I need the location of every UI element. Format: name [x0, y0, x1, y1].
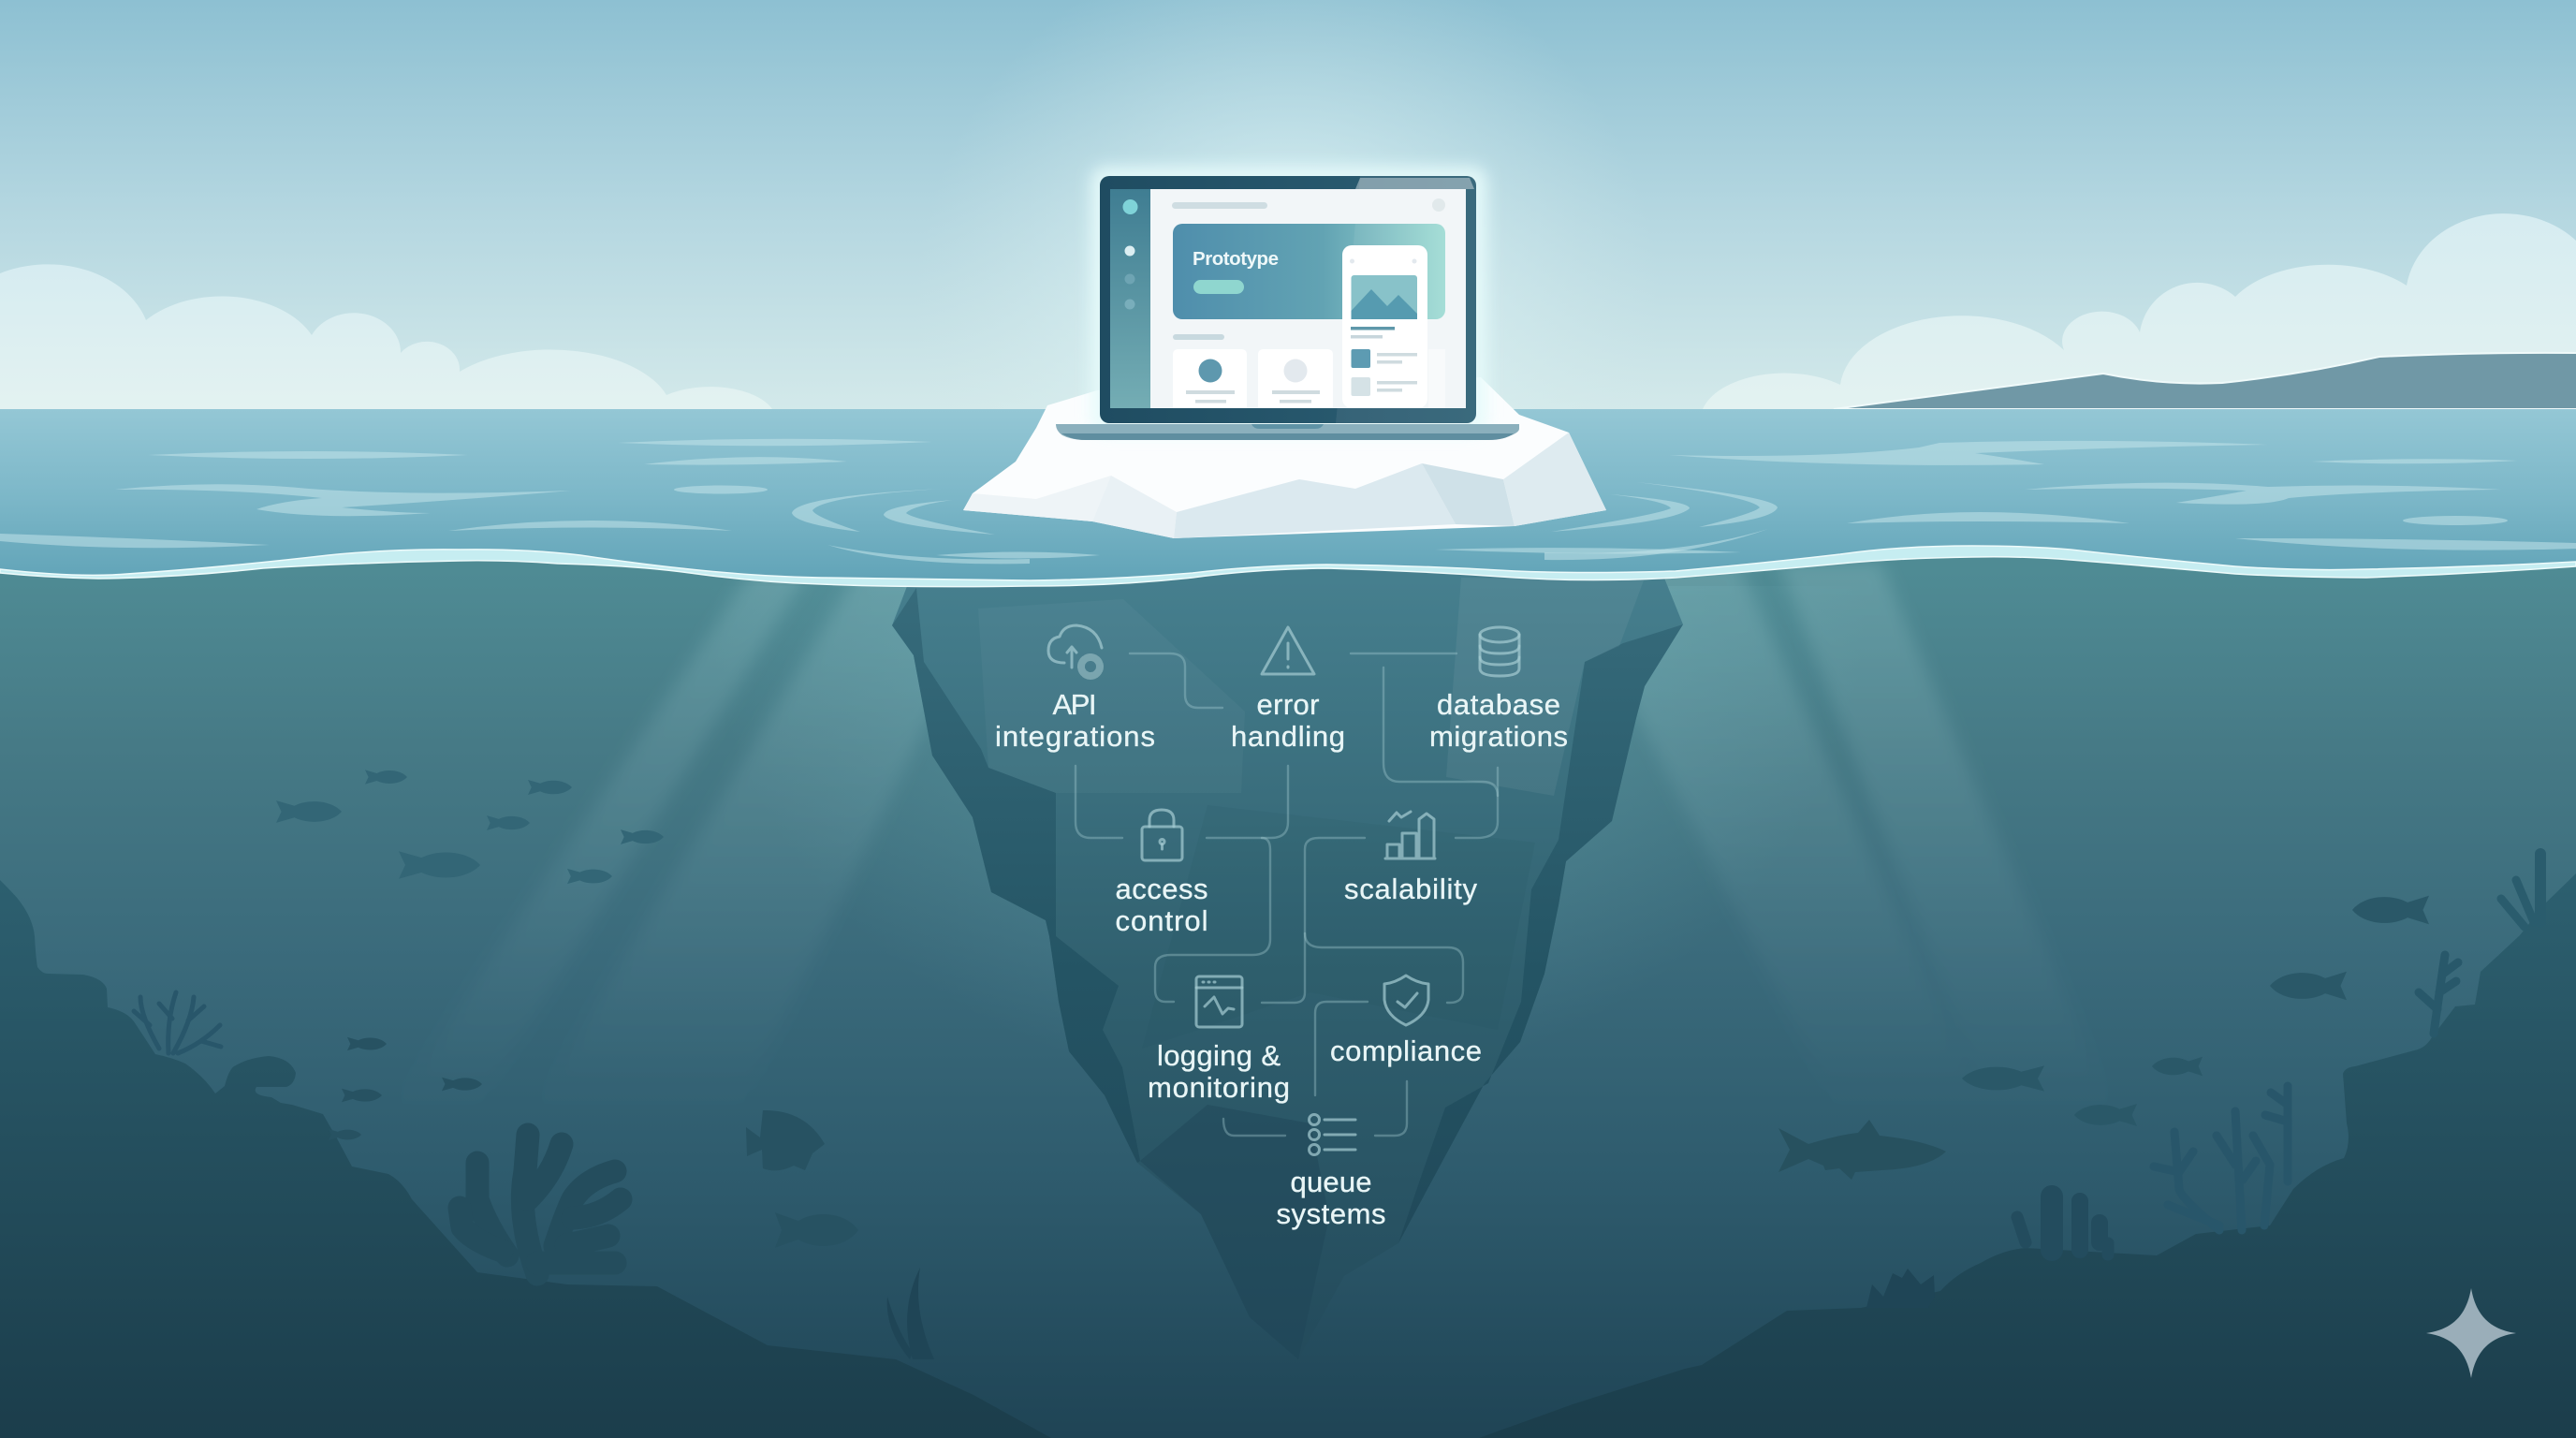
angelfish: [746, 1110, 825, 1170]
laptop: [1056, 167, 1519, 440]
berg body: [892, 569, 1683, 1187]
right seabed and coral: [1479, 854, 2576, 1438]
tube sponge: [2017, 1196, 2108, 1255]
upper fish: [276, 770, 664, 884]
item: API integrations: [995, 625, 1155, 753]
icon: padlock: [1142, 810, 1182, 860]
right light facet: [1446, 578, 1644, 796]
seaweed: [887, 1268, 934, 1359]
label: error handling: handling: [1231, 720, 1345, 753]
laptop base: [1056, 424, 1519, 440]
ice facet front right: [1422, 463, 1515, 526]
right terrain: [1479, 873, 2576, 1438]
clouds right: [1703, 213, 2576, 409]
phone mockup: [1342, 245, 1427, 408]
right dark facet: [1398, 624, 1683, 1243]
ice facet front left: [1092, 476, 1177, 538]
school of fish left: [276, 770, 858, 1248]
label: database migrations: database: [1437, 688, 1560, 721]
label: logging & monitoring: logging &: [1157, 1039, 1281, 1072]
connector lines: [1076, 653, 1498, 1136]
left terrain: [0, 880, 1051, 1438]
ice facet right: [1503, 433, 1606, 526]
screen: [1110, 189, 1466, 408]
icon: queue list: [1309, 1114, 1355, 1155]
ice facet left: [963, 476, 1111, 521]
bezel glare: [1355, 178, 1474, 189]
sea surface: [0, 409, 2576, 587]
small fan coral: [134, 992, 221, 1053]
item: database migrations: [1429, 627, 1568, 753]
central light facet: [978, 599, 1245, 793]
laptop glow in sky: [842, 0, 1734, 410]
card 2: [1258, 349, 1333, 408]
underwater iceberg: [892, 562, 1683, 1359]
icon: cloud with gear: [1048, 625, 1102, 676]
base shadow edge: [1061, 433, 1514, 440]
item: access control: [1116, 810, 1208, 937]
mid facet: [1142, 805, 1535, 1049]
label: scalability: scalability: [1344, 873, 1477, 905]
item: queue systems: [1277, 1114, 1385, 1230]
water highlights left: [0, 439, 1100, 564]
distant hill: [1834, 353, 2576, 409]
school of fish right: [1778, 896, 2429, 1180]
icon: database: [1480, 627, 1519, 676]
trackpad notch: [1251, 424, 1324, 429]
label: access control: access: [1116, 873, 1208, 905]
ice facet front: [1174, 463, 1456, 538]
label: API integrations: API: [1052, 688, 1097, 721]
floating ice top: [963, 377, 1606, 538]
kelp coral: [2419, 955, 2458, 1034]
clouds left: [0, 264, 772, 409]
icon: warning triangle: [1262, 627, 1314, 674]
underwater glow: [655, 586, 1921, 1185]
screen glare: [1336, 176, 1476, 423]
heading: Prototype: Prototype: [1193, 248, 1279, 270]
label: queue systems: queue: [1290, 1166, 1372, 1198]
item: scalability: [1344, 812, 1477, 905]
avatar dot: [1432, 198, 1445, 212]
hero button: [1193, 280, 1244, 294]
label: access control: control: [1116, 904, 1208, 937]
underwater body: [0, 557, 2576, 1438]
sea grass: [2501, 854, 2540, 927]
bottom plant: [1866, 1269, 1935, 1308]
left dark facet: [892, 588, 1140, 1163]
lower dark facet: [1140, 1105, 1315, 1168]
laptop glow: [1090, 167, 1487, 434]
lower fish: [329, 1037, 858, 1248]
sparkle watermark: [2426, 1288, 2516, 1378]
phone image: [1352, 275, 1417, 319]
search bar: [1172, 202, 1267, 209]
branch coral: [2154, 1086, 2288, 1230]
label: queue systems: systems: [1277, 1197, 1385, 1230]
light rays: [554, 562, 2005, 899]
ice outline: [963, 377, 1606, 538]
far left seabed and coral: [0, 880, 1051, 1438]
label: compliance: compliance: [1330, 1034, 1482, 1067]
large branching coral: [460, 1135, 621, 1274]
label: database migrations: migrations: [1429, 720, 1568, 753]
sky: [0, 0, 2576, 410]
card 1: [1173, 349, 1247, 408]
label: error handling: error: [1256, 688, 1320, 721]
icon: monitor window: [1196, 976, 1242, 1027]
card 3 sliver: [1428, 349, 1445, 408]
item: error handling: [1231, 627, 1345, 753]
label: logging & monitoring: monitoring: [1148, 1071, 1290, 1104]
icon: shield check: [1384, 976, 1428, 1025]
label: API integrations: integrations: [995, 720, 1155, 753]
section label: [1173, 334, 1224, 340]
icon: growth bars: [1385, 812, 1435, 858]
salmon: [1778, 1120, 1946, 1180]
sidebar: [1110, 189, 1150, 408]
surface line band: [0, 546, 2576, 587]
item: logging and monitoring: [1148, 976, 1290, 1104]
item: compliance: [1330, 976, 1482, 1067]
hero banner: [1173, 224, 1445, 319]
water highlights right: [1435, 441, 2576, 560]
lid: [1100, 176, 1476, 423]
